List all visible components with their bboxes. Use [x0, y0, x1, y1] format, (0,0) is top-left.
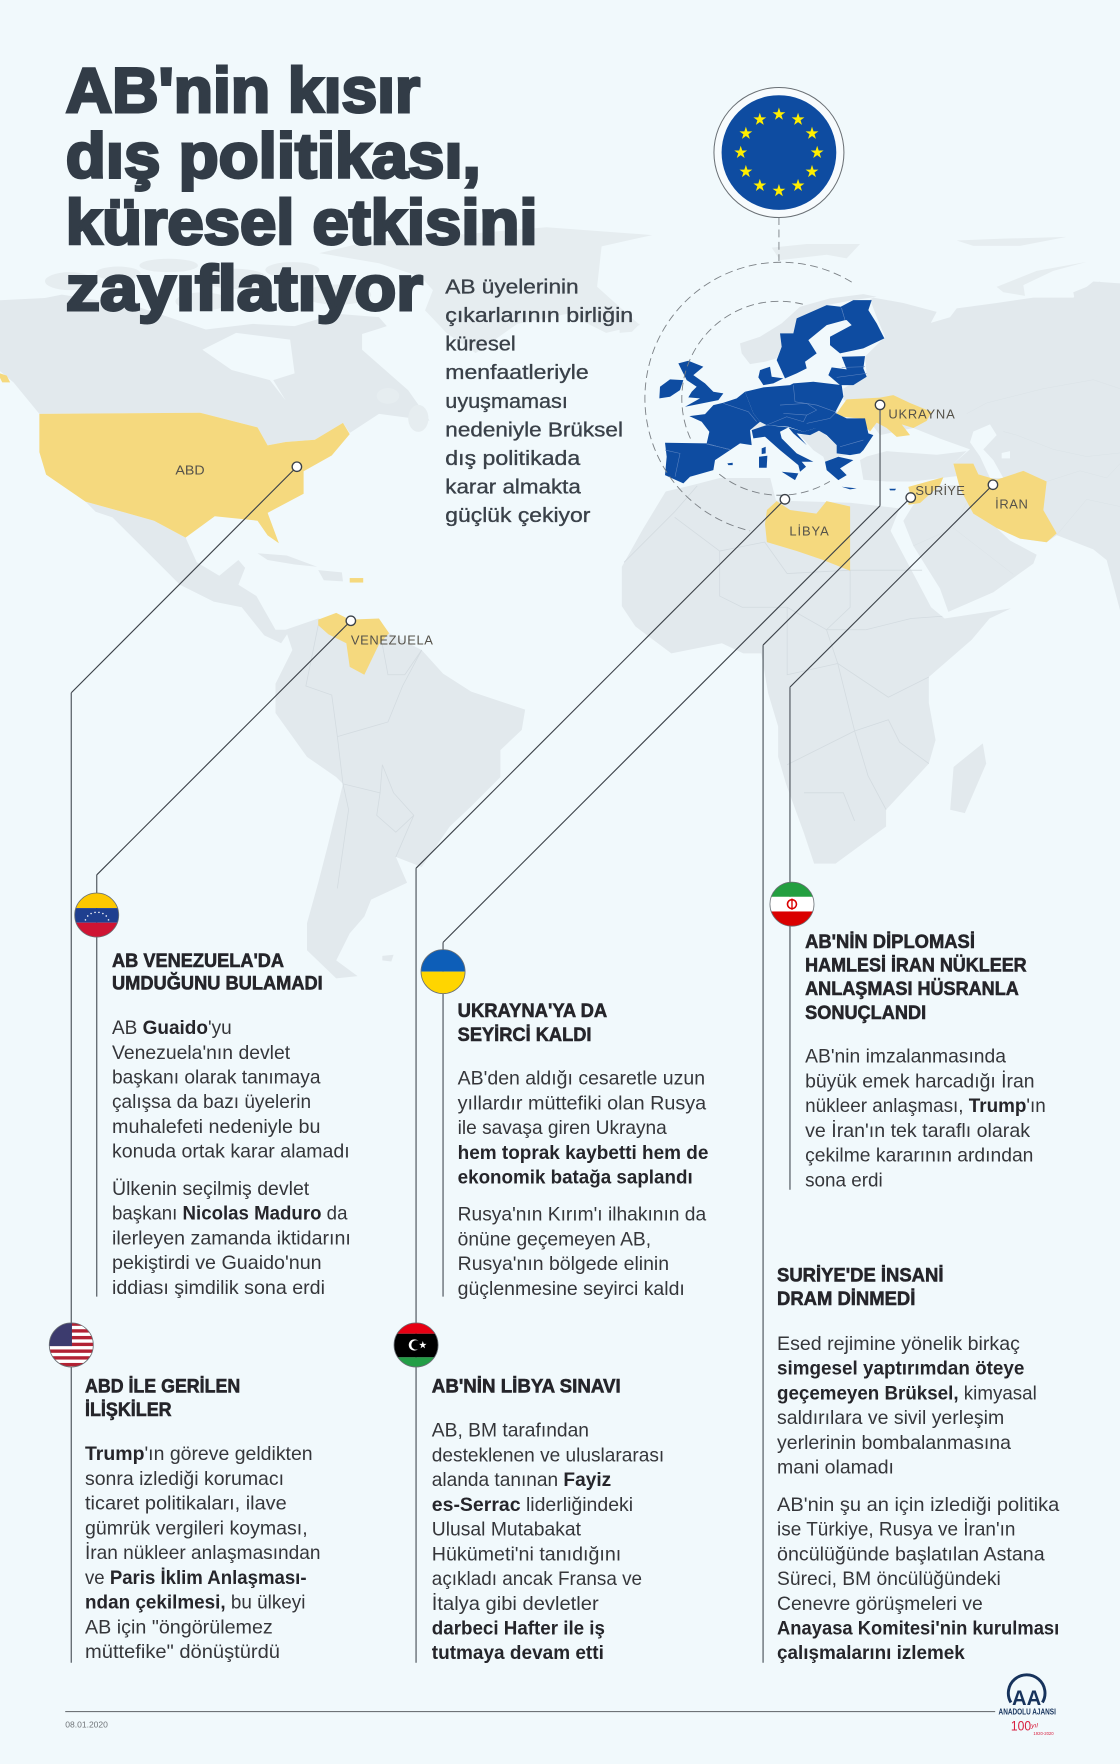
- heading: UKRAYNA'YA DA: [458, 1001, 607, 1022]
- panel: Libya: [394, 1322, 664, 1664]
- leader line: Venezuela: [97, 616, 356, 1297]
- body text: nükleer anlaşması, Trump'ın: [805, 1096, 1046, 1117]
- heading: AB VENEZUELA'DA: [112, 951, 284, 972]
- map: Ukraine, Syria, Iran highlighted: [835, 395, 1057, 542]
- leader line: Syria: [763, 493, 915, 1663]
- leader line: Iran: [790, 480, 998, 1190]
- panel: Venezuela: [74, 893, 351, 1299]
- icon: Ukraine flag: [421, 949, 466, 994]
- body text: ve Paris İklim Anlaşması-: [85, 1568, 307, 1589]
- body text: pekiştirdi ve Guaido'nun: [112, 1253, 322, 1274]
- body text: İran nükleer anlaşmasından: [85, 1543, 320, 1564]
- panel: USA: [48, 1322, 320, 1663]
- heading: İLİŞKİLER: [85, 1400, 172, 1421]
- body text: çalışsa da bazı üyelerin: [112, 1092, 311, 1113]
- body text: yerlerinin bombalanmasına: [777, 1433, 1011, 1454]
- subtitle text: güçlük çekiyor: [445, 505, 591, 527]
- leader line: Libya: [416, 495, 790, 1663]
- heading: [777, 1265, 943, 1310]
- body text: büyük emek harcadığı İran: [805, 1071, 1035, 1092]
- body text: es-Serrac liderliğindeki: [432, 1495, 633, 1516]
- map: Libya highlighted: [765, 501, 850, 571]
- body text: ilerleyen zamanda iktidarını: [112, 1228, 351, 1249]
- map: USA highlighted: [39, 413, 350, 543]
- body text: sona erdi: [805, 1170, 883, 1191]
- body text: müttefike" dönüştürdü: [85, 1642, 280, 1663]
- icon: Venezuela flag: [74, 893, 119, 938]
- body text: AB Guaido'yu: [112, 1018, 232, 1039]
- body text: saldırılara ve sivil yerleşim: [777, 1408, 1004, 1429]
- leader line: USA: [71, 462, 302, 1663]
- map: EU members: [659, 300, 896, 490]
- body text: Hükümeti'ni tanıdığını: [432, 1544, 621, 1565]
- map: North America land: [0, 227, 652, 643]
- map: Europe: [659, 294, 896, 490]
- body text: [777, 1334, 1060, 1664]
- body text: hem toprak kaybetti hem de: [458, 1143, 708, 1164]
- body text: ticaret politikaları, ilave: [85, 1494, 287, 1515]
- heading: [112, 951, 323, 995]
- body text: Ulusal Mutabakat: [432, 1520, 582, 1541]
- body text: ndan çekilmesi, bu ülkeyi: [85, 1593, 305, 1614]
- body text: AB'den aldığı cesaretle uzun: [458, 1069, 705, 1090]
- subtitle text: nedeniyle Brüksel: [445, 419, 623, 441]
- map: Norway and Balkans non-members: [740, 294, 877, 462]
- body text: AB'nin imzalanmasında: [805, 1047, 1006, 1068]
- subtitle text: dış politikada: [445, 448, 581, 470]
- body text: [432, 1421, 664, 1664]
- logo: Anadolu Ajansı: [999, 1675, 1056, 1736]
- heading: HAMLESİ İRAN NÜKLEER: [805, 956, 1027, 977]
- body text: [458, 1069, 708, 1300]
- icon: Iran flag: [769, 882, 815, 927]
- map country labels: SURİYE: [915, 483, 965, 498]
- body text: darbeci Hafter ile iş: [432, 1619, 605, 1640]
- leader line: Ukraine: [443, 400, 885, 1297]
- world map: [0, 227, 1120, 978]
- body text: iddiası şimdilik sona erdi: [112, 1278, 325, 1299]
- map country labels: UKRAYNA: [888, 406, 955, 421]
- logo: Anadolu Ajansı: 1920-2020: [1033, 1731, 1054, 1736]
- title: dış politikası,: [66, 122, 481, 192]
- body text: Rusya'nın Kırım'ı ilhakının da: [458, 1205, 707, 1226]
- heading: UMDUĞUNU BULAMADI: [112, 973, 323, 995]
- panel: Syria: [777, 1265, 1060, 1664]
- body text: çalışmalarını izlemek: [777, 1643, 965, 1664]
- map: Venezuela highlighted: [318, 613, 389, 675]
- heading: [805, 932, 1027, 1024]
- map country labels: LİBYA: [789, 523, 829, 538]
- body text: simgesel yaptırımdan öteye: [777, 1359, 1024, 1380]
- body text: Rusya'nın bölgede elinin: [458, 1254, 669, 1275]
- body text: ile savaşa giren Ukrayna: [458, 1118, 667, 1139]
- map: Iceland: [620, 323, 640, 333]
- heading: AB'NİN LİBYA SINAVI: [432, 1377, 621, 1398]
- map: Puerto Rico: [350, 578, 363, 583]
- body text: muhalefeti nedeniyle bu: [112, 1117, 320, 1138]
- body text: [805, 1047, 1046, 1191]
- heading: SONUÇLANDI: [805, 1003, 926, 1024]
- body text: Trump'ın göreve geldikten: [85, 1444, 313, 1465]
- body text: tutmaya devam etti: [432, 1643, 604, 1664]
- date: 08.01.2020: [65, 1719, 108, 1729]
- body text: [85, 1444, 320, 1663]
- heading: SURİYE'DE İNSANİ: [777, 1265, 943, 1286]
- body text: alanda tanınan Fayiz: [432, 1470, 611, 1491]
- subtitle text: AB üyelerinin: [445, 277, 579, 299]
- map: Africa land: [622, 478, 1011, 864]
- subtitle text: uyuşmaması: [445, 391, 568, 413]
- heading: SEYİRCİ KALDI: [458, 1025, 591, 1046]
- heading: DRAM DİNMEDİ: [777, 1289, 915, 1310]
- body text: desteklenen ve uluslararası: [432, 1445, 664, 1466]
- title: [66, 56, 538, 324]
- map: South America land: [276, 619, 525, 978]
- heading: [458, 1001, 607, 1046]
- body text: ise Türkiye, Rusya ve İran'ın: [777, 1520, 1015, 1541]
- body text: Cenevre görüşmeleri ve: [777, 1594, 983, 1615]
- dashed connector and focus circles around Europe: [645, 217, 852, 531]
- body text: AB, BM tarafından: [432, 1421, 589, 1442]
- panel: Ukraine: [421, 949, 708, 1300]
- title: AB'nin kısır: [66, 56, 420, 126]
- body text: öncülüğünde başlatılan Astana: [777, 1544, 1045, 1565]
- map country labels: ABD: [175, 463, 205, 478]
- body text: açıkladı ancak Fransa ve: [432, 1569, 642, 1590]
- map country labels: İRAN: [995, 496, 1028, 511]
- map: Alaska sliver: [0, 373, 10, 382]
- subtitle text: [445, 277, 633, 527]
- body text: İtalya gibi devletler: [432, 1594, 599, 1615]
- body text: AB'nin şu an için izlediği politika: [777, 1495, 1060, 1516]
- icon: USA flag: [48, 1322, 94, 1367]
- body text: konuda ortak karar alamadı: [112, 1142, 350, 1163]
- map country labels: VENEZUELA: [351, 632, 433, 647]
- icon: Libya flag: [394, 1322, 439, 1369]
- subtitle text: çıkarlarının birliğin: [445, 305, 633, 327]
- body text: ve İran'ın tek taraflı olarak: [805, 1121, 1030, 1142]
- subtitle text: küresel: [445, 334, 516, 356]
- body text: güçlenmesine seyirci kaldı: [458, 1279, 685, 1300]
- title: küresel etkisini: [66, 188, 538, 258]
- body text: Venezuela'nın devlet: [112, 1043, 291, 1064]
- logo: Anadolu Ajansı: ANADOLU AJANSI: [999, 1707, 1056, 1716]
- panel: Iran: [769, 882, 1046, 1191]
- subtitle text: karar almakta: [445, 476, 582, 498]
- map: EU inner borders: [665, 308, 867, 477]
- body text: yıllardır müttefiki olan Rusya: [458, 1093, 707, 1114]
- body text: sonra izlediği korumacı: [85, 1469, 284, 1490]
- subtitle text: menfaatleriyle: [445, 362, 589, 384]
- body text: çekilme kararının ardından: [805, 1146, 1033, 1167]
- icon: EU flag medallion: [714, 88, 844, 218]
- body text: Esed rejimine yönelik birkaç: [777, 1334, 1020, 1355]
- title: zayıflatıyor: [66, 254, 423, 324]
- body text: ekonomik batağa saplandı: [458, 1168, 693, 1189]
- body text: Ülkenin seçilmiş devlet: [112, 1179, 310, 1200]
- body text: Süreci, BM öncülüğündeki: [777, 1569, 1001, 1590]
- logo: Anadolu Ajansı: 100: [1011, 1719, 1031, 1734]
- logo: Anadolu Ajansı: yıl: [1030, 1722, 1038, 1729]
- heading: ABD İLE GERİLEN: [85, 1377, 240, 1398]
- heading: [85, 1377, 240, 1421]
- heading: ANLAŞMASI HÜSRANLA: [805, 979, 1019, 1000]
- body text: [112, 1018, 351, 1299]
- body text: Anayasa Komitesi'nin kurulması: [777, 1619, 1059, 1640]
- body text: AB için "öngörülemez: [85, 1617, 273, 1638]
- logo: Anadolu Ajansı: AA: [1012, 1686, 1041, 1710]
- body text: geçemeyen Brüksel, kimyasal: [777, 1383, 1037, 1404]
- body text: mani olamadı: [777, 1458, 894, 1479]
- body text: gümrük vergileri koyması,: [85, 1518, 308, 1539]
- heading: AB'NİN DİPLOMASİ: [805, 932, 975, 953]
- body text: önüne geçemeyen AB,: [458, 1229, 651, 1250]
- map: Eurasia land: [772, 237, 1120, 612]
- map country labels: [175, 406, 1028, 647]
- body text: başkanı Nicolas Maduro da: [112, 1204, 348, 1225]
- body text: başkanı olarak tanımaya: [112, 1068, 321, 1089]
